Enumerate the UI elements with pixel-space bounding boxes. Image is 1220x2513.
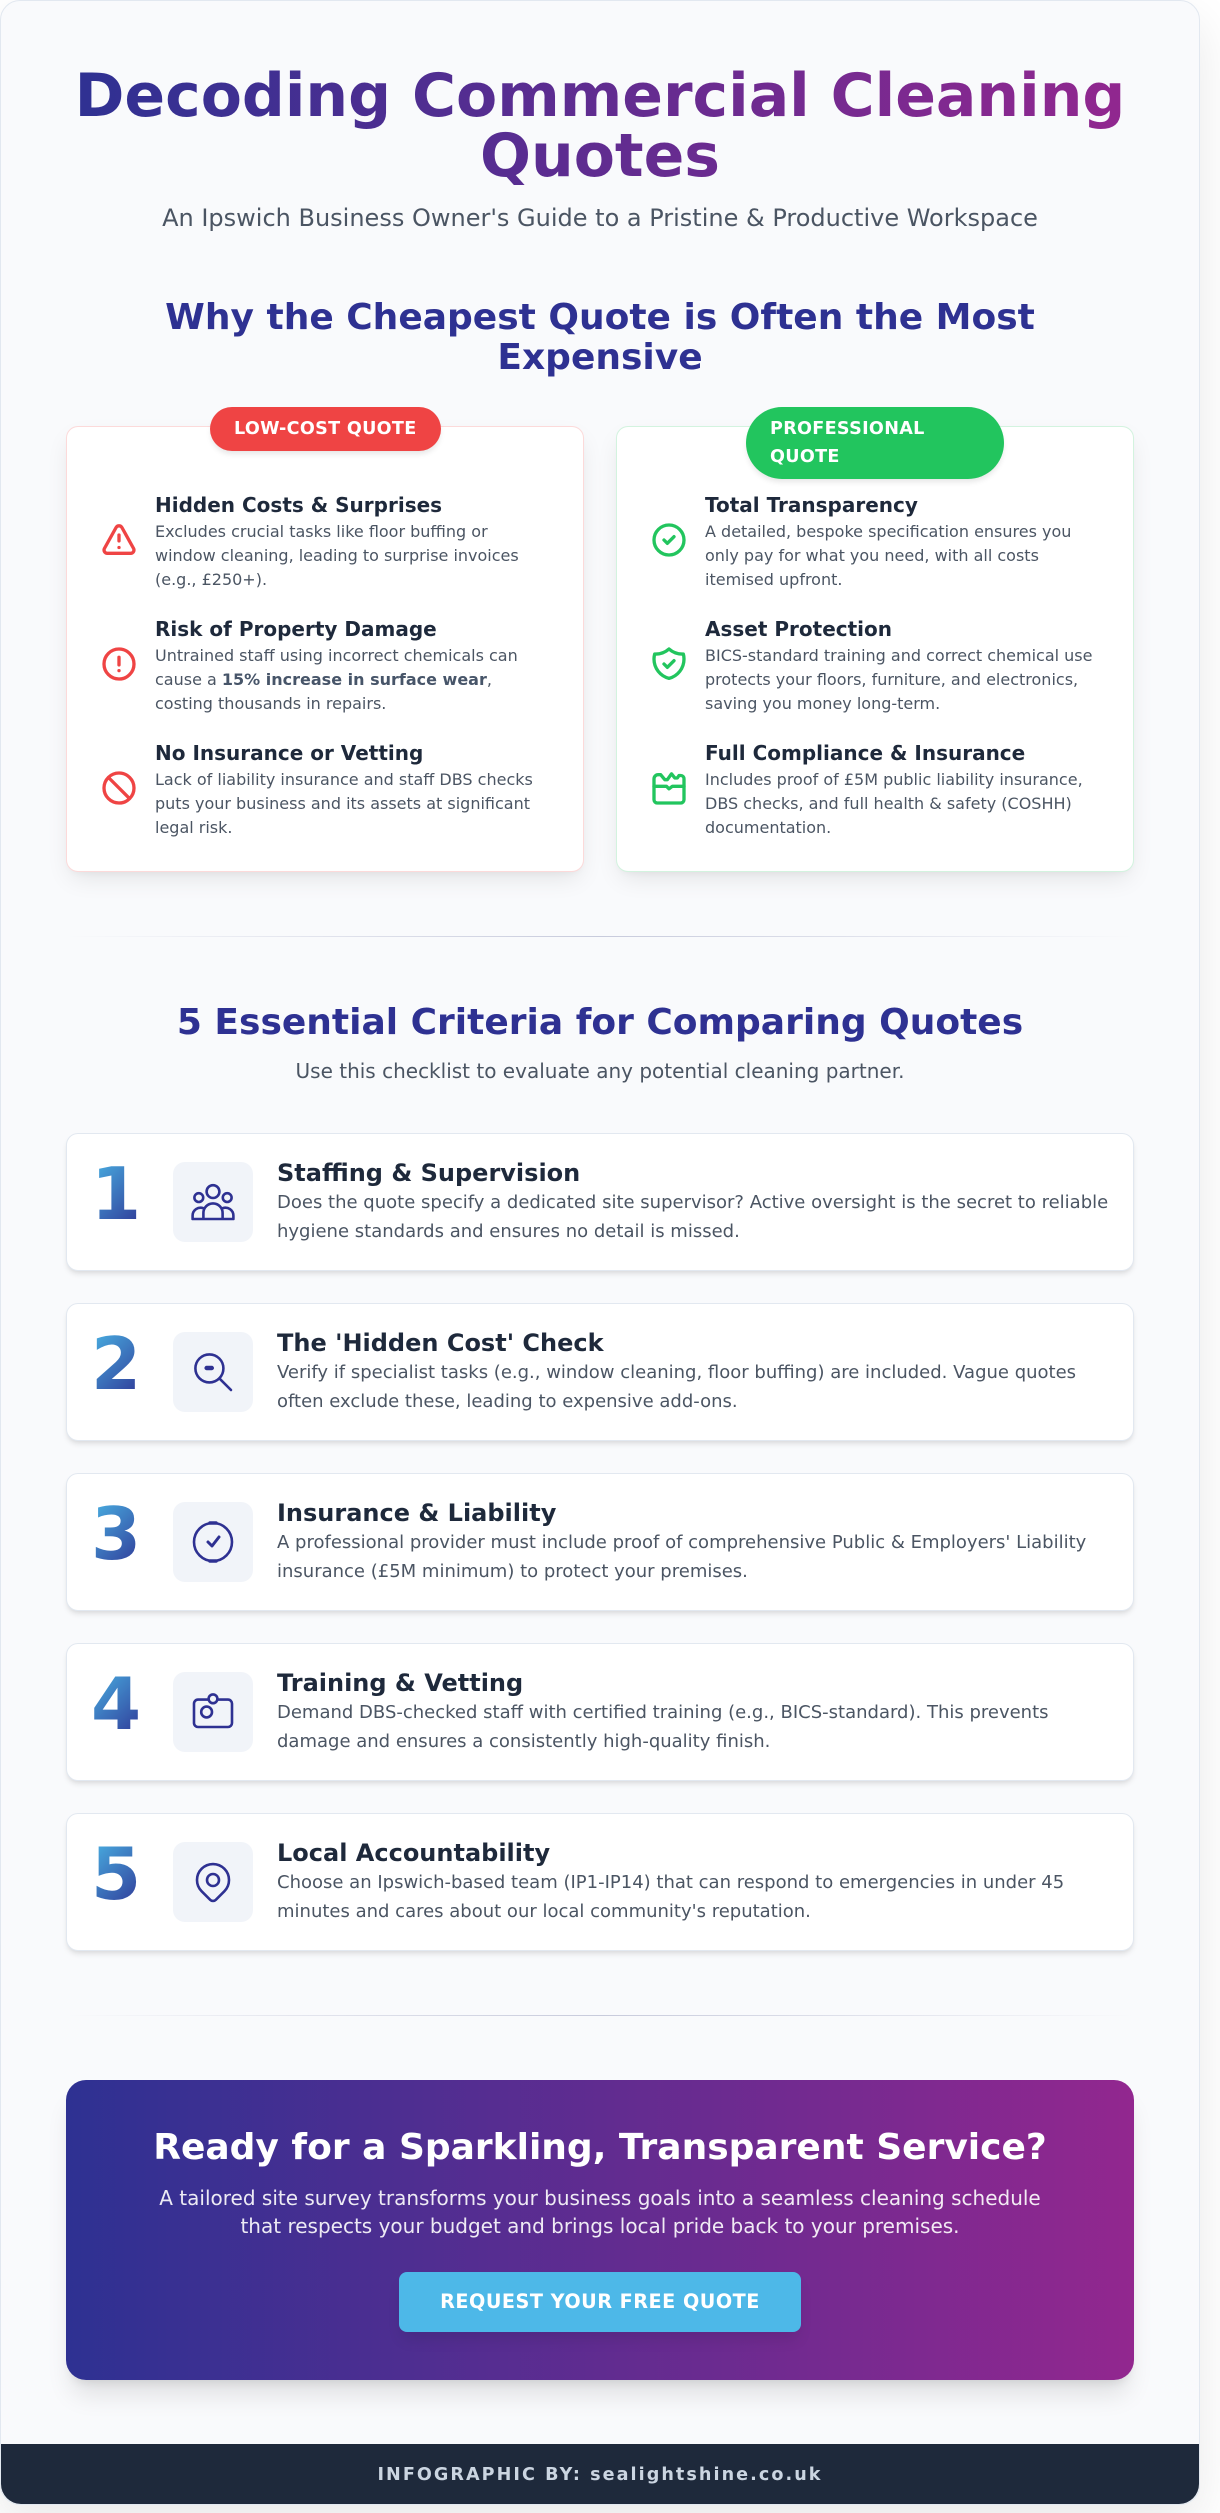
criterion text: A professional provider must include proof of comprehensive Public & Employers' Liability [277,1532,1086,1553]
criterion text: Does the quote specify a dedicated site supervisor? Active oversight is the secret to reliable [277,1192,1108,1213]
call to action text: that respects your budget and brings local pride back to your premises. [240,2214,960,2238]
item text: saving you money long-term. [705,694,940,712]
criterion text: Choose an Ipswich-based team (IP1-IP14) that can respond to emergencies in under 45 [277,1872,1064,1893]
icon: magnifier [173,1332,253,1412]
item: property damage [102,617,518,712]
item: hidden costs [102,493,519,588]
heading: why the cheapest quote: Expensive [497,337,703,378]
call to action panel [66,2080,1134,2380]
icon: ban [102,771,136,805]
item text: Includes proof of £5M public liability insurance, [705,770,1083,788]
item text: A detailed, bespoke specification ensures you [705,522,1071,540]
criterion 5 [66,1813,1134,1951]
subtitle: An Ipswich Business Owner's Guide to a Pristine & Productive Workspace [162,204,1038,232]
criterion text [277,1702,1049,1752]
icon: id badge [173,1672,253,1752]
item title: Asset Protection [705,617,892,641]
item text [155,522,519,588]
button: REQUEST YOUR FREE QUOTE [440,2290,760,2313]
criterion text [277,1872,1064,1922]
icon: team [173,1162,253,1242]
number 3: 3 [91,1492,141,1576]
item text: Untrained staff using incorrect chemicals can [155,646,518,664]
button [399,2272,801,2332]
number 1: 1 [91,1152,141,1236]
icon: warning triangle [102,524,136,555]
item text: itemised upfront. [705,570,842,588]
item text: legal risk. [155,818,232,836]
icon: shield check [652,647,686,680]
item text: Lack of liability insurance and staff DBS checks [155,770,533,788]
criterion title: Local Accountability [277,1839,550,1867]
icon: location pin [173,1842,253,1922]
criterion title: Staffing & Supervision [277,1159,580,1187]
title: Quotes [480,121,720,191]
criterion text: hygiene standards and ensures no detail is missed. [277,1221,740,1242]
icon: verified check [173,1502,253,1582]
criterion 1 [66,1133,1134,1271]
item text: documentation. [705,818,831,836]
number 4: 4 [91,1662,141,1746]
item text: (e.g., £250+). [155,570,267,588]
title [66,66,1134,186]
item text: puts your business and its assets at significant [155,794,530,812]
panel: professional quote [616,426,1134,872]
badge: low-cost quote: LOW-COST QUOTE [234,419,417,439]
section subtitle: Use this checklist to evaluate any potential cleaning partner. [296,1059,904,1083]
item: total transparency [652,493,1071,588]
icon: document box [652,772,686,805]
item text: BICS-standard training and correct chemical use [705,646,1092,664]
icon: check circle [652,523,686,557]
item: no insurance [102,741,533,836]
item text: window cleaning, leading to surprise invoices [155,546,519,564]
heading: why the cheapest quote [165,297,1035,378]
item: asset protection [652,617,1092,712]
item text: DBS checks, and full health & safety (COSHH) [705,794,1072,812]
heading: 5 essential criteria: 5 Essential Criteria for Comparing Quotes [177,1002,1023,1043]
item title: Total Transparency [705,493,918,517]
criterion 2 [66,1303,1134,1441]
number 5: 5 [91,1832,141,1916]
badge: professional quote: QUOTE [770,447,840,467]
heading: why the cheapest quote: Why the Cheapest Quote is Often the Most [165,297,1035,338]
item text [705,522,1071,588]
criterion title: Insurance & Liability [277,1499,556,1527]
item text: cause a 15% increase in surface wear, [155,670,492,688]
footer bar [1,2444,1199,2504]
item text [705,770,1083,836]
item text: Excludes crucial tasks like floor buffing or [155,522,488,540]
title: Decoding Commercial Cleaning [75,61,1125,131]
badge: professional quote: PROFESSIONAL [770,419,925,439]
item text [155,770,533,836]
call to action text: A tailored site survey transforms your business goals into a seamless cleaning schedule [159,2186,1041,2210]
call to action text [159,2186,1041,2238]
item title: Hidden Costs & Surprises [155,493,442,517]
criterion text: often exclude these, leading to expensive add-ons. [277,1391,738,1412]
criterion title: The 'Hidden Cost' Check [277,1329,604,1357]
item text: protects your floors, furniture, and electronics, [705,670,1078,688]
badge: low-cost quote [210,407,441,451]
criterion text [277,1192,1108,1242]
footer bar: INFOGRAPHIC BY: sealightshine.co.uk [377,2465,823,2485]
panel: low-cost quote [66,426,584,872]
item text: costing thousands in repairs. [155,694,386,712]
number 2: 2 [91,1322,141,1406]
item text: only pay for what you need, with all costs [705,546,1039,564]
criterion text [277,1532,1086,1582]
icon: exclamation circle [102,647,136,681]
criterion text: Verify if specialist tasks (e.g., window cleaning, floor buffing) are included. Vague quotes [277,1362,1076,1383]
criterion text [277,1362,1076,1412]
criterion text: Demand DBS-checked staff with certified training (e.g., BICS-standard). This prevents [277,1702,1049,1723]
criterion title: Training & Vetting [277,1669,523,1697]
item text [705,646,1092,712]
badge: professional quote [746,407,1004,479]
item title: Full Compliance & Insurance [705,741,1025,765]
criterion text: damage and ensures a consistently high-quality finish. [277,1731,770,1752]
criterion 3 [66,1473,1134,1611]
call to action heading: Ready for a Sparkling, Transparent Service? [153,2127,1047,2168]
criterion text: insurance (£5M minimum) to protect your premises. [277,1561,748,1582]
item: full compliance [652,741,1083,836]
criterion 4 [66,1643,1134,1781]
criterion text: minutes and cares about our local community's reputation. [277,1901,811,1922]
item text [155,646,518,712]
item title: Risk of Property Damage [155,617,437,641]
item title: No Insurance or Vetting [155,741,423,765]
